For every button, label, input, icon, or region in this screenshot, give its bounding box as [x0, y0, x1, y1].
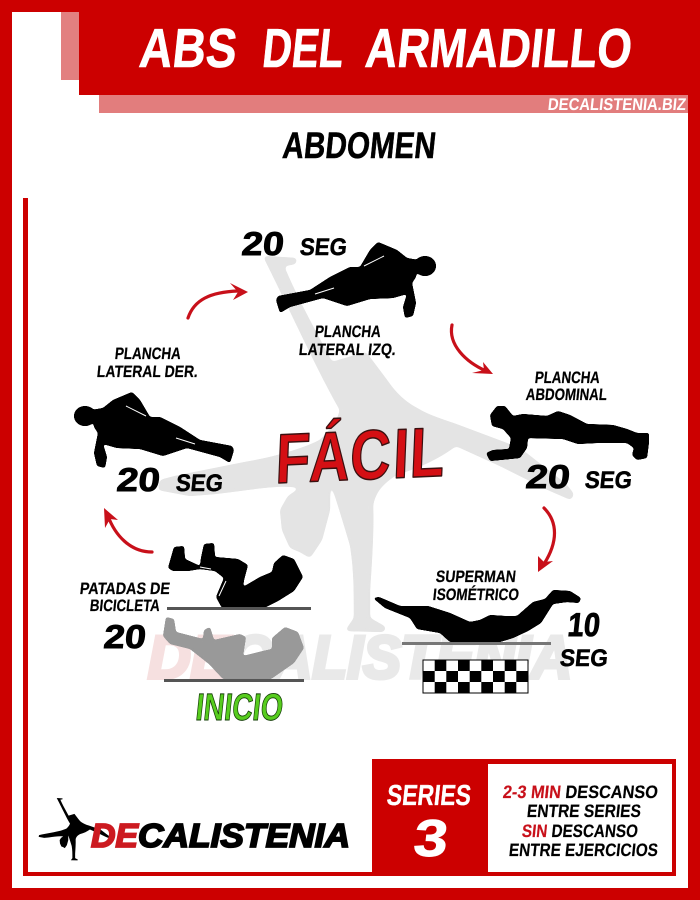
- unit: SEG: [175, 470, 224, 497]
- exercise: plancha abdominal: [486, 368, 649, 496]
- title: ABS: [137, 17, 240, 79]
- arrow: top left: [188, 283, 248, 318]
- website strip: [99, 95, 688, 114]
- title: [137, 17, 635, 79]
- name: LATERAL DER.: [96, 362, 199, 381]
- name: BICICLETA: [89, 596, 161, 615]
- name: [96, 344, 199, 381]
- background watermark: [148, 624, 572, 691]
- exercise: patadas de bicicleta: [79, 543, 311, 682]
- title: ARMADILLO: [363, 17, 635, 79]
- exercise: plancha lateral derecha: [74, 344, 234, 499]
- silhouette: bicycle crunch end position: [168, 543, 303, 608]
- reps: 20: [102, 619, 148, 656]
- name: [298, 322, 397, 359]
- arrow: lower right: [538, 508, 554, 572]
- name: ISOMÉTRICO: [432, 585, 520, 604]
- panel: series and rest: [372, 759, 676, 876]
- name: ABDOMINAL: [525, 385, 608, 404]
- name: PLANCHA: [314, 322, 382, 341]
- leg highlight: [200, 567, 226, 596]
- logo figure: [39, 798, 110, 860]
- silhouette: left side plank: [276, 242, 436, 318]
- title: DEL: [260, 17, 347, 79]
- exercise: superman isometrico: [373, 567, 609, 693]
- header banner: [79, 0, 700, 95]
- silhouette: superman hold: [373, 590, 581, 642]
- name: [79, 579, 171, 615]
- series count: 3: [411, 810, 451, 868]
- subtitle: ABDOMEN: [281, 124, 438, 166]
- series label: SERIES: [385, 780, 473, 812]
- name: PATADAS DE: [79, 579, 171, 598]
- header accent block: [61, 12, 79, 80]
- difficulty label: FÁCIL: [274, 413, 446, 499]
- silhouette: right side plank: [74, 392, 234, 468]
- unit: SEG: [584, 467, 633, 494]
- floor line: [402, 642, 551, 645]
- name: SUPERMAN: [435, 567, 517, 586]
- rest instructions: ENTRE EJERCICIOS: [508, 840, 659, 860]
- arrow: top right: [451, 325, 493, 374]
- unit: SEG: [559, 645, 609, 672]
- highlight lines: [315, 256, 384, 294]
- logo word CALISTENIA: CALISTENIA: [138, 817, 350, 854]
- logo word DE: DE: [91, 817, 139, 854]
- highlight lines: [126, 406, 195, 444]
- time: 20: [240, 226, 286, 263]
- floor line: [164, 679, 304, 682]
- unit: SEG: [299, 234, 348, 261]
- exercise: plancha lateral izquierda: [240, 226, 436, 359]
- watermark DE: DE: [148, 624, 232, 691]
- name: PLANCHA: [534, 368, 601, 387]
- silhouette: forearm plank: [486, 406, 649, 461]
- rest instructions: ENTRE SERIES: [526, 801, 642, 821]
- rest instructions: 2-3 MIN DESCANSO: [502, 782, 659, 802]
- name: LATERAL IZQ.: [298, 340, 397, 359]
- time: 10: [566, 607, 602, 644]
- rest instructions: [502, 782, 659, 860]
- rest instructions: SIN DESCANSO: [521, 821, 639, 841]
- silhouette: bicycle crunch start position: [163, 617, 304, 679]
- floor line: [167, 607, 311, 610]
- name: PLANCHA: [114, 344, 182, 363]
- name: [432, 567, 520, 604]
- start label: INICIO: [194, 687, 285, 729]
- brand logo: [39, 798, 350, 860]
- background handstand figure: [158, 256, 574, 632]
- watermark CALISTENIA: CALISTENIA: [230, 624, 572, 691]
- arrow: lower left: [104, 508, 152, 552]
- name: [525, 368, 608, 404]
- content frame line: [23, 198, 372, 876]
- time: 20: [115, 462, 162, 499]
- checkered finish flag: [423, 660, 528, 693]
- time: 20: [524, 459, 572, 496]
